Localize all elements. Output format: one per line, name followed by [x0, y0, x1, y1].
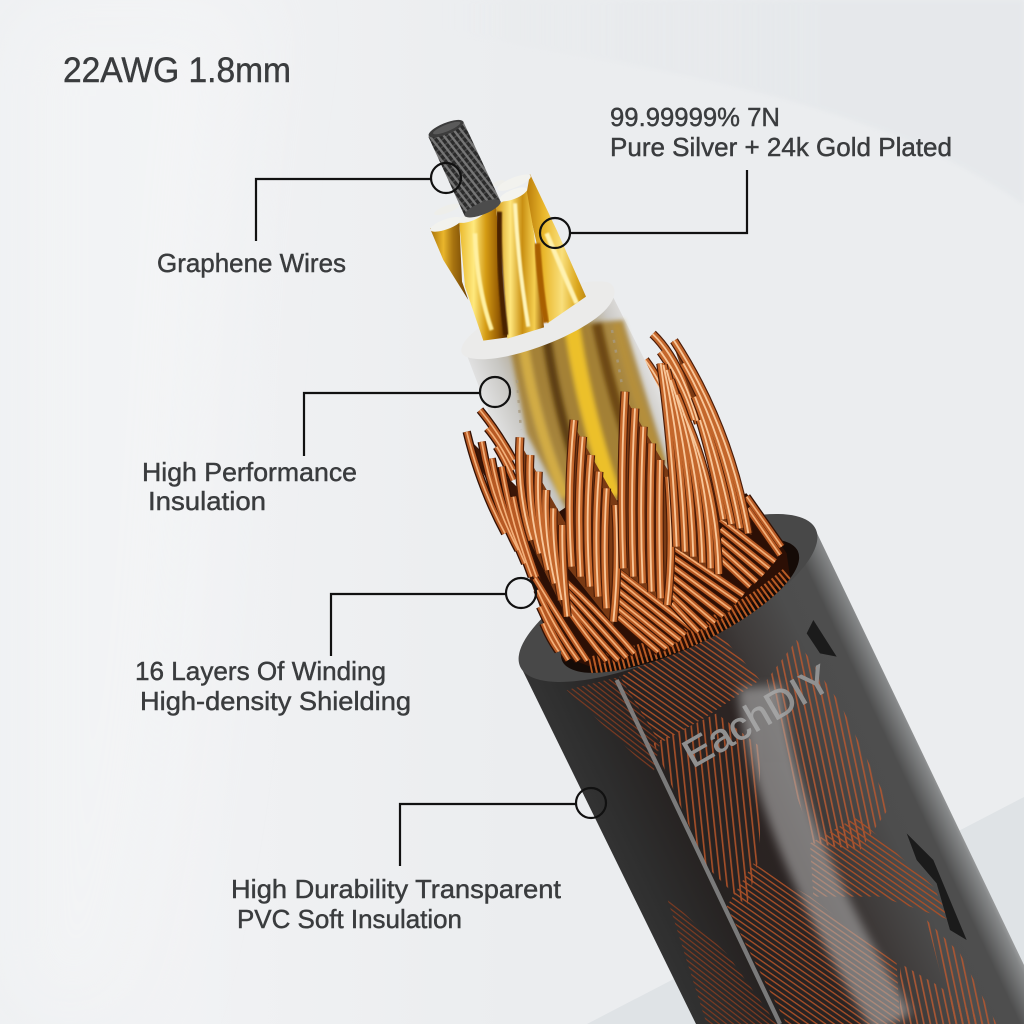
- callout: high performance insulation: [142, 377, 510, 516]
- transparent PVC jacket: [498, 481, 1024, 1024]
- callout: winding shielding: 16 Layers Of Winding: [135, 656, 386, 686]
- callout: silver conductor: [540, 102, 952, 248]
- perforation dots: [517, 330, 622, 430]
- braid seen through jacket: [567, 620, 997, 1024]
- gold plated silver conductors: [427, 116, 586, 341]
- copper braided shield: [463, 340, 790, 667]
- copper strands behind insulation: [645, 334, 698, 448]
- callout: winding shielding: [135, 578, 536, 716]
- brand text: EachDIY: [675, 657, 839, 776]
- insulation end face: [461, 281, 615, 359]
- gold conductors seen through insulation: [507, 320, 667, 510]
- callout: silver conductor: 99.99999% 7N: [610, 102, 780, 132]
- callout: PVC insulation: PVC Soft Insulation: [237, 904, 462, 934]
- title: 22AWG 1.8mm: [63, 51, 291, 90]
- insulation tube: [461, 281, 690, 620]
- callout: high performance insulation: Insulation: [148, 486, 266, 516]
- callout: silver conductor: Pure Silver + 24k Gold Plated: [610, 132, 952, 162]
- graphene wire: [427, 116, 503, 221]
- jacket rim: [498, 481, 838, 715]
- callout: winding shielding: High-density Shielding: [140, 686, 411, 716]
- callout: PVC insulation: [231, 788, 606, 934]
- callout: PVC insulation: High Durability Transparent: [231, 874, 562, 904]
- callout: graphene wires: [157, 163, 461, 278]
- callout: graphene wires: Graphene Wires: [157, 248, 346, 278]
- callout: high performance insulation: High Performance: [142, 457, 357, 487]
